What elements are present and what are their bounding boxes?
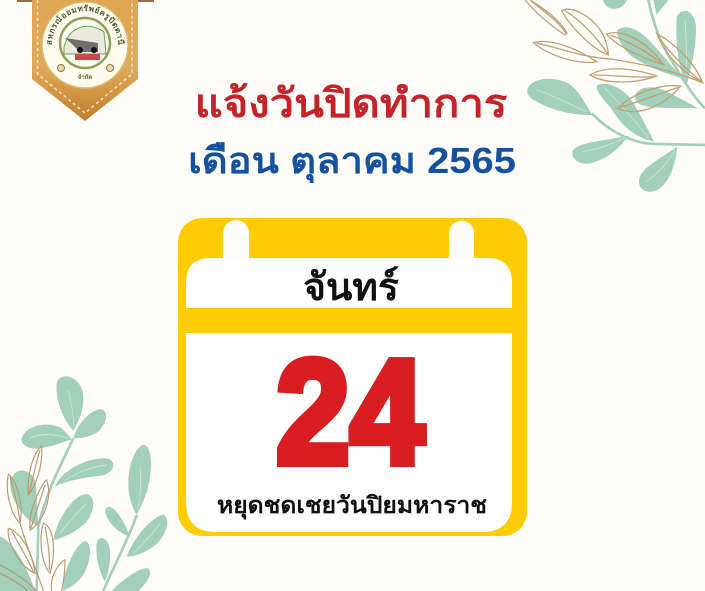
weekday: จันทร์ (303, 265, 399, 309)
calendar header panel (186, 258, 512, 308)
logo ribbon badge (17, 0, 154, 121)
date number: 24 (276, 330, 424, 495)
seal: จำกัด (78, 73, 92, 81)
ribbon top bar (17, 0, 154, 2)
calendar body panel (186, 333, 512, 532)
seal (41, 1, 129, 89)
calendar ring right (449, 220, 474, 262)
ribbon stitching (38, 0, 132, 113)
calendar ring left (223, 220, 249, 262)
title: แจ้งวันปิดทำการ (195, 81, 508, 126)
decoration: bottom-left leaves (0, 376, 167, 591)
seal: สหกรณ์ออมทรัพย์ครูปัตตานี (47, 4, 125, 45)
calendar (178, 218, 527, 536)
decoration: top-right leaves (525, 0, 705, 192)
subtitle: เดือน ตุลาคม 2565 (188, 142, 516, 183)
holiday caption: หยุดชดเชยวันปิยมหาราช (217, 493, 487, 521)
calendar frame (178, 218, 527, 536)
ribbon body (32, 0, 138, 121)
